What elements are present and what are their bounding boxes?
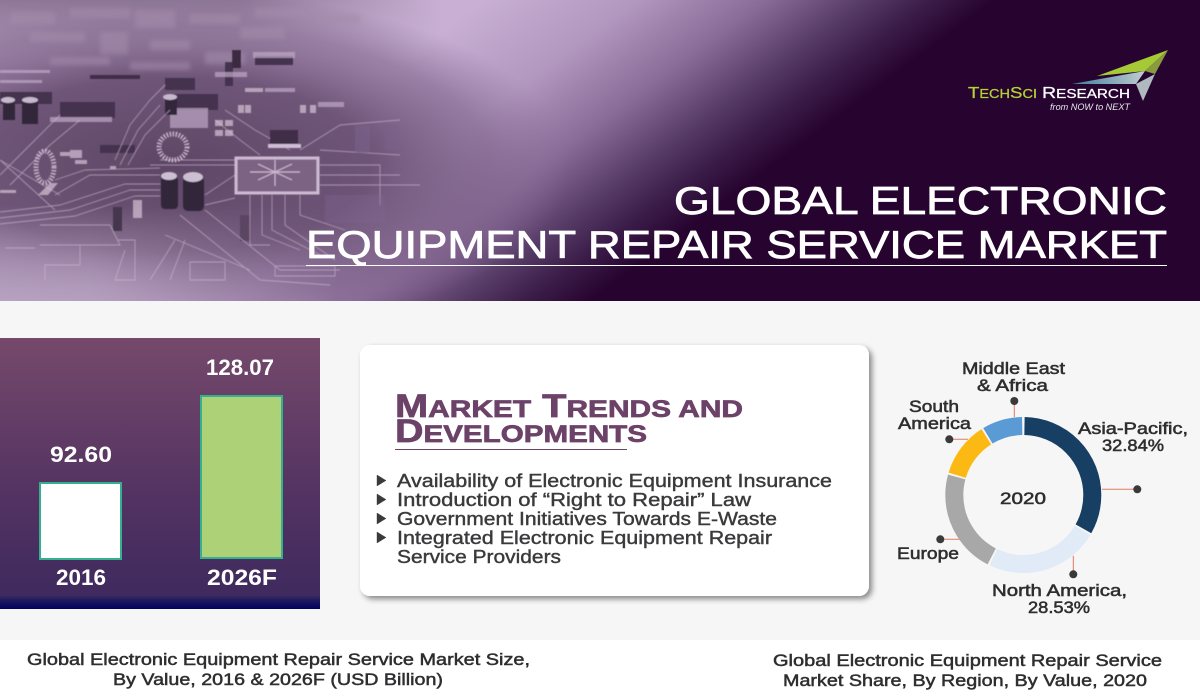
bar: 2026F: 128.07 — [206, 355, 274, 380]
main chip — [236, 158, 318, 193]
bar: 2016: 2016 — [56, 565, 106, 590]
bullet list: Integrated Electronic Equipment Repair — [397, 528, 772, 548]
caption: market share: Global Electronic Equipment Repair Service — [773, 651, 1162, 670]
donut labels: Asia-Pacific, — [1078, 419, 1188, 438]
bar: 2026F — [201, 355, 282, 590]
bullet list: Government Initiatives Towards E-Waste — [397, 509, 777, 529]
heading — [395, 388, 743, 450]
bullet list: Introduction of “Right to Repair” Law — [397, 490, 752, 510]
bar: 2016: 92.60 — [50, 442, 112, 467]
donut labels: Middle East — [962, 359, 1065, 378]
bullet list: Service Providers — [397, 547, 561, 567]
title: GLOBAL ELECTRONIC — [674, 180, 1167, 223]
panel: bar chart — [0, 338, 320, 609]
bar: 2016 — [40, 442, 121, 590]
donut labels: & Africa — [977, 376, 1049, 395]
caption: market share — [773, 651, 1162, 690]
capacitors — [1, 50, 251, 241]
donut labels — [897, 359, 1188, 617]
caption: market size: By Value, 2016 & 2026F (USD Billion) — [113, 670, 443, 689]
logo mark — [1072, 50, 1168, 101]
donut labels: 28.53% — [1028, 598, 1090, 617]
chip: small IC — [90, 75, 399, 223]
donut labels: Europe — [897, 544, 959, 563]
logo wordmark: TECH SCI — [968, 85, 1037, 102]
logo wordmark: from NOW to NEXT — [1050, 102, 1131, 113]
donut labels: South — [909, 397, 959, 416]
caption: market size: Global Electronic Equipment Repair Service Market Size, — [27, 650, 530, 669]
title — [306, 180, 1167, 267]
bar: 2026F: 2026F — [207, 565, 277, 590]
donut labels: 32.84% — [1102, 436, 1164, 455]
donut labels: North America, — [992, 581, 1127, 600]
header banner — [0, 0, 1200, 301]
donut segments — [954, 426, 1092, 564]
title: EQUIPMENT REPAIR SERVICE MARKET — [306, 224, 1167, 267]
bullet list — [377, 471, 832, 567]
traces — [0, 85, 420, 285]
heading: DEVELOPMENTS — [395, 413, 647, 449]
bullet list: Availability of Electronic Equipment Insurance — [397, 471, 832, 491]
leader lines — [936, 397, 1141, 578]
caption: market share: Market Share, By Region, By Value, 2020 — [783, 671, 1147, 690]
logo: TechSci Research — [968, 50, 1168, 113]
donut labels: 2020 — [1000, 489, 1046, 508]
donut labels: America — [898, 414, 972, 433]
footer band — [0, 640, 1200, 700]
caption: market size — [27, 650, 530, 689]
circuit board photo — [0, 8, 420, 285]
logo wordmark — [968, 85, 1131, 113]
logo wordmark: RESEARCH — [1042, 85, 1130, 102]
heading: M ARKET T RENDS AND — [395, 388, 743, 424]
donut chart — [897, 359, 1188, 617]
panel: market trends card — [360, 345, 869, 596]
